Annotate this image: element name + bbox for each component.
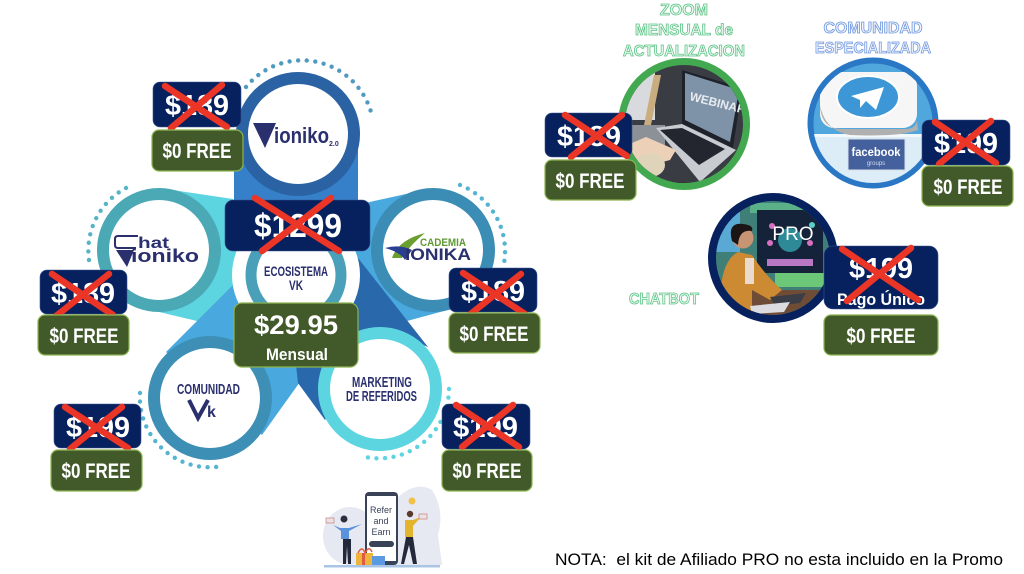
price: academia: $189 [461,276,525,308]
free: comunidad [51,450,142,491]
free: chat [38,315,129,355]
price: zoom [545,113,632,157]
speech bubble icon [408,498,416,504]
badge: facebook groups [848,139,905,170]
free: chat: $0 FREE [50,325,118,348]
price: center offer: $29.95 [254,310,338,340]
price: center: $1299 [254,207,342,244]
price: comunidad especializada: $199 [934,128,998,160]
logo: Academia Vionika: IONIKA [405,245,471,264]
dotted arc: comunidad [140,393,223,467]
diagram: ecosistema VK [38,60,540,491]
price: top [153,82,241,128]
free: comunidad especializada: $0 FREE [934,176,1002,199]
circle: Academia Vionika [377,194,489,306]
title: zoom mensual: ACTUALIZACION [623,43,745,60]
price: chatbot pago unico: Pago Único [837,290,925,309]
title: zoom mensual: ZOOM [660,2,708,19]
price: zoom: $189 [557,121,621,153]
price: center [225,198,370,251]
badge: facebook groups: groups [867,161,885,167]
badge: facebook groups: facebook [852,147,901,159]
logo: Vioniko: ioniko [274,123,329,148]
free: chatbot: $0 FREE [846,325,916,348]
price: chatbot pago unico [824,246,938,309]
circle: webinar laptop photo [620,60,750,195]
title: comunidad especializada: COMUNIDAD [824,20,922,37]
free: academia [449,313,540,353]
price: chatbot pago unico: $199 [849,253,913,285]
title: comunidad especializada: ESPECIALIZADA [815,40,931,57]
logo: Chat Vioniko [115,235,199,267]
price: chat [40,270,127,316]
man [401,511,427,564]
wedge: top [234,133,358,243]
logo: Academia Vionika: CADEMIA [420,237,466,249]
free: comunidad especializada [922,166,1013,206]
circle: telegram and facebook groups [810,60,940,188]
price: comunidad: $199 [66,412,130,444]
circle: top Vioniko [242,78,354,190]
logo: Academia Vionika [385,233,471,264]
text: Marketing de referidos: MARKETING [352,374,412,391]
circle: Marketing de referidos [324,333,436,445]
gifts [356,549,385,565]
title: zoom mensual [623,2,745,60]
dotted arc: top [246,60,371,112]
dotted arc: academia [460,185,505,268]
price: top: $189 [165,90,229,122]
price: center offer: Mensual [266,345,328,364]
free: marketing: $0 FREE [452,460,522,483]
phone: Refer [370,505,392,515]
wedge: chat [159,188,300,345]
dotted arc: chat [88,188,126,266]
logo: Chat Vioniko: hat [138,235,170,252]
wedge: marketing [290,258,428,420]
free: academia: $0 FREE [460,323,528,346]
circle: chatbot pro photo: PRO [772,224,814,245]
circle: Chat Vioniko [103,194,215,306]
price: chat: $189 [51,278,115,310]
text: Comunidad VK: k [207,404,216,421]
wedge: academia [350,188,455,321]
illustration: refer and earn [323,487,442,568]
phone: Earn [371,527,391,537]
free: chatbot [824,315,938,355]
text: Ecosistema VK [264,263,328,293]
price: marketing: $199 [453,412,518,444]
woman [326,516,362,564]
note: NOTA: el kit de Afiliado PRO no esta incluido en la Promo [555,550,1003,569]
free: top: $0 FREE [162,140,232,163]
logo: Vioniko: 2.0 [329,141,339,148]
phone: and [373,516,389,526]
text: Marketing de referidos: DE REFERIDOS [346,388,417,405]
text: Marketing de referidos [346,374,417,405]
circle: chatbot pro photo [708,193,838,323]
free: marketing [442,450,532,491]
logo: Chat Vioniko: ioniko [131,246,199,266]
text: Ecosistema VK: VK [289,277,303,293]
wedge: comunidad [166,278,330,435]
price: marketing [442,404,530,449]
circle: webinar laptop photo: WEBINAR [688,89,748,117]
price: comunidad [54,404,141,449]
price: comunidad especializada [922,120,1010,165]
label: chatbot: CHATBOT [629,291,699,308]
free: zoom: $0 FREE [556,170,624,193]
text: Comunidad VK: COMUNIDAD [177,381,240,398]
free: comunidad: $0 FREE [62,460,130,483]
title: zoom mensual: MENSUAL de [635,22,733,39]
text: Ecosistema VK: ECOSISTEMA [264,263,328,279]
phone [365,492,398,565]
free: top [152,130,243,171]
circle: center ecosistema [232,211,360,339]
text: Comunidad VK [177,381,240,421]
price: center offer [234,303,358,367]
free: zoom [545,160,636,200]
circle: Comunidad VK [154,342,266,454]
dotted arc: marketing [361,389,449,458]
price: academia [449,268,537,316]
title: comunidad especializada [815,20,931,57]
